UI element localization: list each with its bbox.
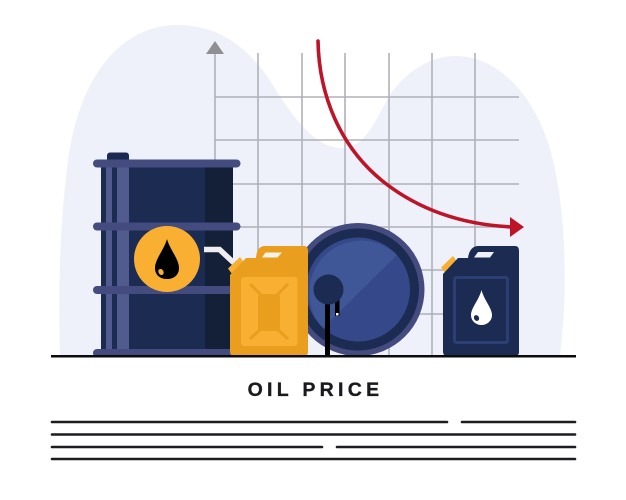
lid dark ring — [297, 228, 419, 350]
lid outer ring — [292, 223, 424, 356]
chart axis with arrow — [206, 41, 224, 160]
black oil drop — [155, 239, 179, 279]
yellow can panel — [241, 277, 298, 346]
navy can panel — [454, 278, 508, 342]
yellow can handle opening — [262, 252, 282, 258]
background blob — [59, 25, 565, 356]
yellow jerry can — [228, 246, 308, 356]
yellow can emboss — [250, 284, 288, 339]
barrel label circle — [134, 226, 200, 292]
navy can body — [443, 246, 519, 356]
placeholder text lines — [52, 422, 575, 459]
line chart grid — [215, 53, 519, 356]
white spout — [204, 250, 234, 263]
lid drip — [335, 298, 340, 316]
yellow can cap — [228, 257, 244, 274]
falling price curve arrow — [318, 41, 524, 237]
navy can handle opening — [474, 252, 494, 258]
white oil drop — [471, 290, 492, 325]
lid face — [306, 238, 410, 342]
lid small stem — [325, 298, 330, 356]
barrel cap — [107, 152, 129, 162]
barrel body — [101, 165, 233, 352]
navy can cap — [441, 256, 457, 272]
oil barrel — [93, 152, 240, 357]
barrel rims — [93, 160, 240, 357]
round barrel lid — [292, 223, 424, 356]
barrel shadow side — [205, 165, 233, 352]
yellow can body — [230, 246, 308, 356]
barrel vertical stripes — [106, 165, 129, 352]
lid highlight — [309, 241, 397, 328]
title: OIL PRICE — [248, 379, 383, 401]
navy jerry can — [441, 246, 519, 356]
ground line — [51, 355, 576, 358]
lid plug — [314, 274, 344, 304]
